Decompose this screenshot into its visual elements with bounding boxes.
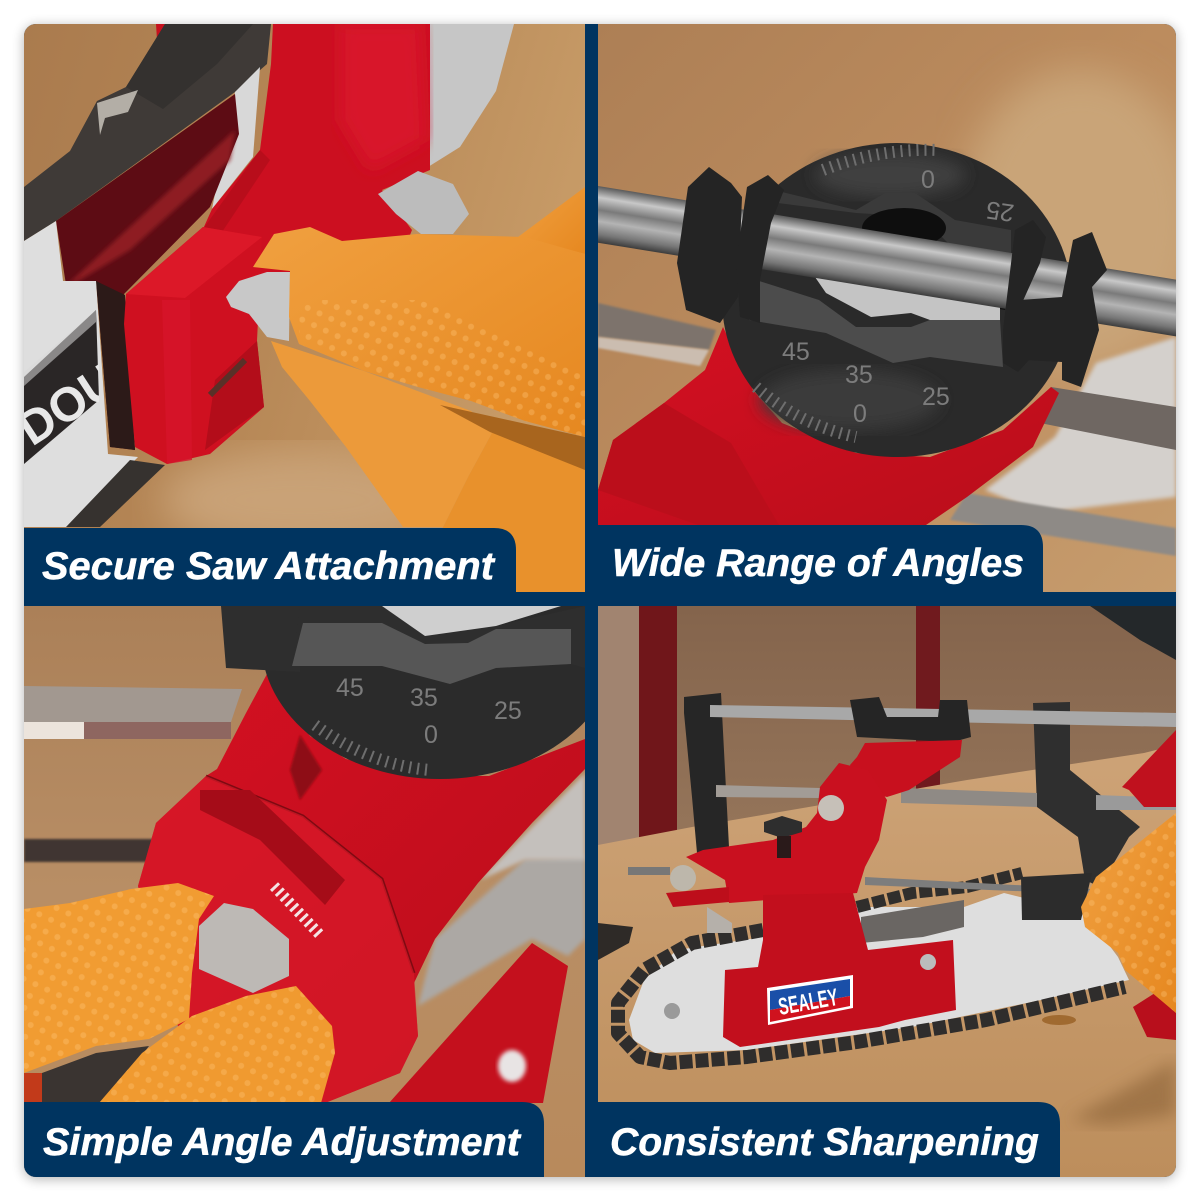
corner tool (1090, 606, 1176, 660)
black clips (677, 167, 1107, 387)
file rod and clamp (865, 873, 1092, 920)
chrome rod (589, 186, 1190, 337)
thumbscrews (226, 171, 469, 341)
cutter blade (126, 24, 253, 109)
angle dial (722, 143, 1072, 457)
label: secure saw attachment: Secure Saw Attachment (42, 545, 496, 588)
angle dial: 35 (845, 361, 873, 389)
sealey badge: SEALEY (776, 984, 840, 1021)
sealey badge (767, 975, 853, 1025)
dark red recess (56, 94, 239, 450)
label: consistent sharpening (598, 1102, 1060, 1177)
label: simple angle adjustment (24, 1102, 544, 1177)
red bracket body (203, 24, 430, 280)
guide bar (629, 893, 1129, 1053)
angle dial: 25 (984, 195, 1016, 227)
angle dial (265, 606, 585, 779)
metal rails background (598, 303, 1176, 556)
angle dial: 45 (782, 338, 810, 366)
angle dial: 0 (853, 400, 867, 428)
red sharpener body (666, 740, 962, 1047)
central mount (778, 192, 1011, 253)
angle dial: 25 (494, 697, 522, 725)
label: wide range of angles: Wide Range of Angles (612, 542, 1024, 585)
black mount (221, 606, 585, 684)
angle dial: 45 (336, 674, 364, 702)
label: consistent sharpening: Consistent Sharpening (610, 1121, 1039, 1164)
bar strip (212, 67, 260, 209)
chain top (24, 24, 271, 241)
red body (598, 327, 1059, 525)
angle dial: 35 (410, 684, 438, 712)
label: secure saw attachment (24, 528, 516, 592)
horizontal divider (24, 592, 1176, 606)
label: simple angle adjustment: Simple Angle Adjustment (43, 1121, 522, 1164)
silver guide disc (428, 24, 514, 167)
red angle body (138, 674, 585, 1103)
bar logo (24, 310, 99, 464)
workbench (598, 745, 1176, 1177)
panel: consistent sharpening (598, 606, 1176, 1177)
saw chain (618, 930, 1125, 1063)
gloved fingers (24, 883, 335, 1103)
panel: simple angle adjustment (24, 606, 585, 1177)
panel: secure saw attachment (9, 24, 585, 592)
embossed markings (200, 790, 345, 905)
blurred background parts (418, 773, 585, 1006)
red clamp block (124, 227, 264, 464)
vertical divider (585, 24, 598, 1177)
silver rail (24, 686, 242, 722)
secondary red part (389, 943, 568, 1103)
orange glove (253, 187, 585, 592)
bar logo: DOU (9, 354, 127, 456)
label: wide range of angles (598, 525, 1043, 592)
sharpening knobs (628, 795, 936, 970)
knurled knob (199, 886, 321, 993)
angle dial: 25 (922, 383, 950, 411)
orange glove (1081, 813, 1176, 1040)
white guide bar (24, 221, 138, 527)
panel: wide range of angles (589, 24, 1200, 592)
angle dial: 0 (424, 721, 438, 749)
sharpener frame (684, 693, 1176, 887)
angle dial: 0 (921, 166, 935, 194)
